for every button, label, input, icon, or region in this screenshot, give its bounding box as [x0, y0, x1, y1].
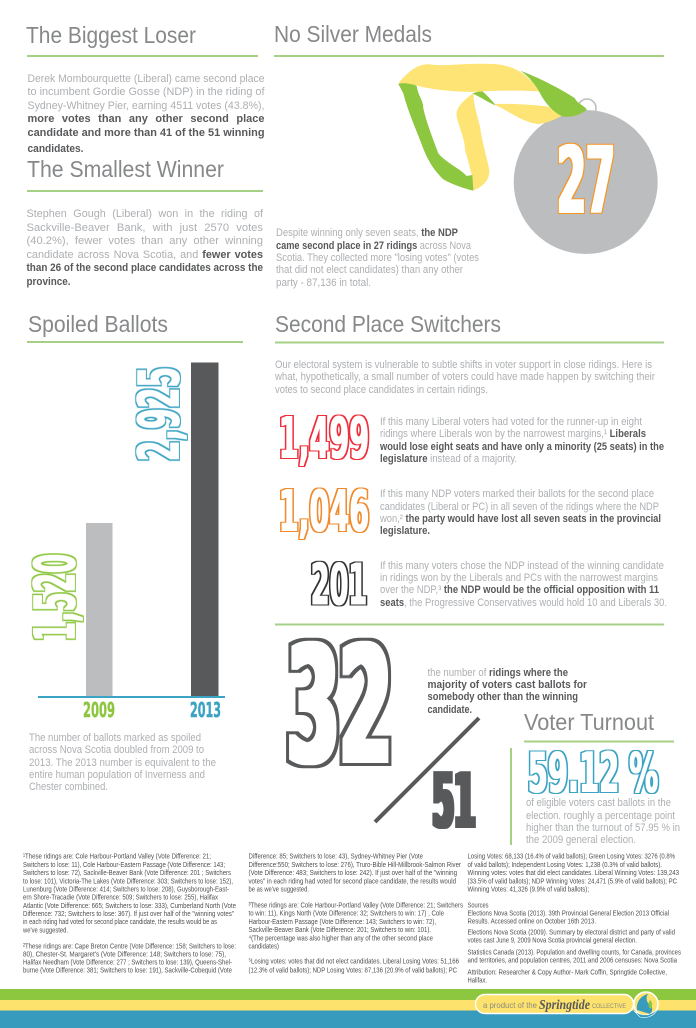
- footnotes: column two: ⁵Losing votes: votes that did not elect candidates. Liberal Losing Votes: 51,166: [248, 956, 459, 966]
- text: 1,046 description: [379, 488, 661, 537]
- panel: 32 of 51 ridings: 32: [287, 613, 392, 801]
- stat: 201 ndp opposition: 201: [311, 553, 367, 618]
- footnotes: column two: (12.3% of valid ballots); NDP Losing Votes: 87,136 (20.9% of valid ballots); PC: [248, 966, 457, 974]
- text block: biggest loser description: more votes than any other second place: [28, 113, 264, 125]
- text: 1,499 description: [379, 416, 664, 465]
- footnotes: column two: votes" in each riding had voted for second place candidate, the results would: [248, 876, 456, 886]
- text block: medal description: Despite winning only seven seats, the NDP: [276, 227, 458, 239]
- text block: biggest loser description: Derek Mombourquette (Liberal) came second place: [28, 73, 264, 85]
- text block: spoiled ballots description: 2013. The 2013 number is equivalent to the: [29, 757, 216, 769]
- axis label: 2009: 2009: [83, 698, 115, 722]
- text: 1,499 description: If this many Liberal voters had voted for the runner-up in eight: [380, 416, 642, 428]
- text: ridings description: majority of voters cast ballots for: [428, 679, 588, 691]
- footnotes: column one: [22, 852, 236, 974]
- text: 1,499 description: ridings where Liberals won by the narrowest margins,¹ Liberals: [380, 428, 646, 440]
- text: 201 description: [380, 560, 667, 609]
- badge: a product of the springtide collective: COLLECTIVE: [592, 1003, 626, 1010]
- bar chart: spoiled ballots by year: [23, 362, 225, 722]
- text block: switchers intro: votes to second place candidates in certain ridings.: [275, 384, 488, 396]
- footnotes: column two: (Vote Difference: 483; Switchers to lose: 242). If just over half of the "winning: [248, 868, 457, 877]
- text block: medal description: party - 87,136 in total.: [276, 277, 371, 289]
- text block: spoiled ballots description: Chester combined.: [29, 781, 108, 793]
- fraction slash: [375, 718, 479, 822]
- footnotes: column one: ²These ridings are: Cape Breton Centre (Vote Difference: 158; Switchers to lose:: [23, 942, 236, 950]
- bar: 2013: [191, 362, 218, 697]
- axis label: 2013: 2013: [190, 698, 221, 722]
- text block: switchers intro: [274, 359, 655, 396]
- panel: voter turnout: [510, 709, 680, 846]
- footnotes: column one: to lose: 101), Victoria-The Lakes (Vote Difference: 303; Switchers to lose: 152),: [23, 876, 233, 886]
- footnotes: column two: be as we've suggested.: [248, 884, 309, 894]
- badge: a product of the springtide collective: [476, 994, 634, 1014]
- footnotes: column three and sources: Halifax.: [468, 976, 487, 984]
- text block: smallest winner description: (40.2%), fewer votes than any other winning: [26, 235, 263, 247]
- panel: second place switchers: [274, 311, 667, 618]
- text block: smallest winner description: than 26 of the second place candidates across the: [26, 262, 263, 274]
- heading: voter turnout: Voter Turnout: [524, 709, 654, 735]
- footnotes: column three and sources: Results. Accessed online on October 16th 2013.: [468, 916, 596, 926]
- text: 1,499 description: legislature instead of a majority.: [380, 453, 517, 465]
- text block: medal description: [276, 227, 479, 289]
- text block: spoiled ballots description: The number of ballots marked as spoiled: [29, 732, 201, 744]
- footnotes: column two: candidates): [248, 942, 279, 950]
- footnotes: column one: Halifax Needham (Vote Difference: 277 ; Switchers to lose: 139), Queens-Shel-: [23, 958, 232, 966]
- footnotes: column two: to win: 11), Kings North (Vote Difference: 32; Switchers to win: 17) , Cole: [248, 908, 444, 918]
- text: ridings description: somebody other than the winning: [428, 691, 578, 703]
- text: 201 description: in ridings won by the Liberals and PCs with the narrowest margins: [380, 572, 658, 584]
- footnotes: column one: Switchers to lose: 11), Cole Harbour-Eastern Passage (Vote Difference: 143;: [23, 860, 225, 869]
- text block: spoiled ballots description: [29, 732, 216, 793]
- text block: smallest winner description: [26, 208, 264, 288]
- text block: medal description: Scotia. They collected more "losing votes" (votes: [276, 252, 479, 264]
- text block: biggest loser description: Sydney-Whitney Pier, earning 4511 votes (43.8%),: [28, 100, 264, 112]
- heading: spoiled ballots: Spoiled Ballots: [28, 311, 168, 337]
- number: 1,046: 1,046: [279, 479, 369, 544]
- text block: smallest winner description: Stephen Gough (Liberal) won in the riding of: [26, 208, 264, 220]
- text block: medal description: came second place in 27 ridings across Nova: [276, 240, 472, 252]
- bar chart: spoiled ballots by year: 1,520: [23, 554, 88, 641]
- text block: smallest winner description: candidate across Nova Scotia, and fewer votes: [26, 249, 263, 261]
- footnotes: column one: in each riding had voted for second place candidate, the results would be as: [23, 917, 217, 926]
- footnotes: column one: ¹These ridings are: Cole Harbour-Portland Valley (Vote Difference: 21;: [23, 852, 211, 860]
- number: 1,499: 1,499: [279, 406, 369, 471]
- footnotes: column three and sources: votes cast June 9, 2009 Nova Scotia provincial general election.: [468, 936, 637, 944]
- heading: second place switchers: Second Place Switchers: [275, 311, 501, 337]
- text: turnout description: [526, 797, 680, 846]
- icon: medal with ribbon: 27: [557, 127, 615, 234]
- text: turnout description: election. roughly a percentage point: [526, 810, 675, 822]
- panel: 32 of 51 ridings: [287, 613, 588, 845]
- footnotes: column two: Harbour-Eastern Passage (Vote Difference: 143; Switchers to win: 72),: [248, 917, 436, 926]
- panel: no silver medals: [274, 21, 664, 289]
- text: 1,046 description: If this many NDP voters marked their ballots for the second place: [380, 488, 654, 500]
- stat: 1,046 ndp: [279, 479, 661, 544]
- footnotes: column two: Difference:550; Switchers to lose: 276), Truro-Bible Hill-Millbrook-Salmon River: [248, 860, 461, 869]
- ribbon: [398, 64, 587, 191]
- text block: spoiled ballots description: entire human population of Inverness and: [29, 769, 205, 781]
- text block: spoiled ballots description: across Nova Scotia doubled from 2009 to: [29, 744, 204, 756]
- footnotes: column three and sources: Sources: [468, 900, 489, 910]
- text block: biggest loser description: to incumbent Gordie Gosse (NDP) in the riding of: [28, 86, 265, 98]
- footnotes: column two: [248, 852, 463, 974]
- text block: medal description: that did not elect candidates) than any other: [276, 264, 463, 276]
- text block: smallest winner description: Sackville-Beaver Bank, with just 2570 votes: [26, 222, 263, 234]
- text: ridings description: candidate.: [428, 704, 472, 716]
- panel: the smallest winner: [26, 156, 264, 288]
- icon: springtide logo: [634, 992, 658, 1018]
- footnotes: column one: ern Shore-Tracadie (Vote Difference: 509; Switchers to lose: 255), Halifax: [23, 892, 218, 902]
- footnotes: column three and sources: [468, 852, 681, 984]
- footnotes: column one: we've suggested.: [22, 926, 68, 934]
- text: 1,046 description: legislature.: [380, 525, 430, 537]
- stat: 201 ndp opposition: [311, 553, 667, 618]
- stat: 1,499 liberals: [279, 406, 664, 471]
- text: 1,046 description: won,² the party would have lost all seven seats in the provincial: [379, 513, 661, 525]
- heading: no silver medals: No Silver Medals: [274, 21, 432, 47]
- heading: the biggest loser: The Biggest Loser: [26, 22, 196, 48]
- footnotes: column one: Switchers to lose: 72), Sackville-Beaver Bank (Vote Difference: 201 ; Switchers: [23, 868, 231, 877]
- text: turnout description: of eligible voters cast ballots in the: [526, 797, 671, 809]
- bar: 2009: [86, 523, 112, 697]
- text: turnout description: the 2009 general election.: [526, 834, 636, 846]
- footnotes: column one: Atlantic (Vote Difference: 665; Switchers to lose: 333), Cumberland North (Vote: [23, 901, 236, 910]
- text block: biggest loser description: [28, 73, 265, 155]
- icon: medal with ribbon: [398, 64, 658, 254]
- footnotes: column two: ⁴(The percentage was also higher than any of the other second place: [248, 934, 433, 942]
- footnotes: column two: Difference: 85; Switchers to lose: 43), Sydney-Whitney Pier (Vote: [248, 852, 423, 860]
- value: 2,925: 2,925: [127, 367, 192, 461]
- panel: the biggest loser: [26, 22, 265, 155]
- text block: smallest winner description: province.: [26, 276, 70, 288]
- text block: biggest loser description: candidate and more than 41 of the 51 winning: [28, 127, 264, 139]
- panel: spoiled ballots: [23, 311, 243, 793]
- text: ridings description: the number of ridings where the: [428, 667, 568, 679]
- text: ridings description: [428, 667, 588, 716]
- footnotes: column three and sources: Winning Votes: 41,326 (9.9% of valid ballots);: [468, 884, 589, 894]
- text block: biggest loser description: candidates.: [28, 143, 84, 155]
- panel: 32 of 51 ridings: 51: [432, 757, 476, 845]
- footnotes: column two: ³These ridings are: Cole Harbour-Portland Valley (Vote Difference: 21; Switchers: [248, 900, 463, 910]
- footnotes: column one: 80), Chester-St. Margaret's (Vote Difference: 148; Switchers to lose: 75),: [23, 950, 226, 958]
- footnotes: column one: Difference: 732; Switchers to lose: 367). If just over half of the "winning votes": [23, 909, 234, 918]
- footnotes: column two: Sackville-Beaver Bank (Vote Difference: 201; Switchers to win: 101).: [248, 925, 431, 934]
- footer band: [0, 989, 696, 1028]
- footnotes: column one: burne (Vote Difference: 381; Switchers to lose: 191), Sackville-Cobequid (Vote: [23, 966, 232, 974]
- text: 201 description: over the NDP,³ the NDP would be the official opposition with 11: [380, 584, 659, 596]
- footnotes: column one: Lunenburg (Vote Difference: 414; Switchers to lose: 208), Guysborough-East-: [23, 884, 229, 894]
- badge: a product of the springtide collective: a product of the: [483, 1001, 538, 1010]
- heading: the smallest winner: The Smallest Winner: [27, 156, 224, 182]
- badge: a product of the springtide collective: Springtide: [539, 998, 590, 1013]
